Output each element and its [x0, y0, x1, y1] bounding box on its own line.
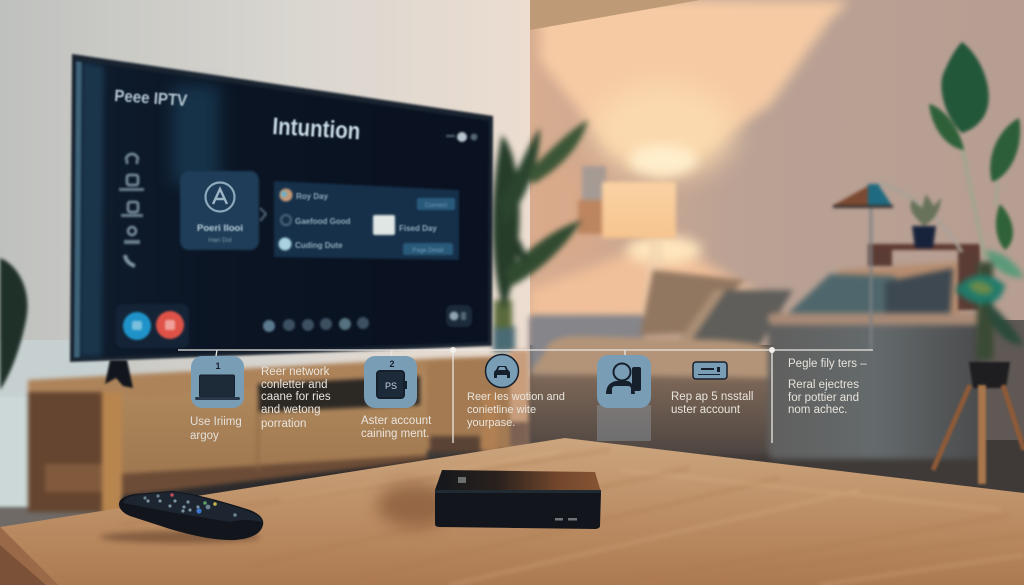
step 1 [190, 356, 331, 442]
tv menu panel: Connect [425, 203, 448, 209]
tv menu panel: Page Detail [412, 248, 444, 254]
tv sidebar icons [119, 154, 144, 266]
ceiling [530, 0, 700, 30]
tv menu panel: Fised Day [399, 224, 437, 233]
tv small button [446, 305, 472, 327]
tv heading: Intuntion [272, 113, 361, 145]
tv divider [124, 296, 470, 298]
tv feet [105, 360, 133, 388]
wooden table [0, 438, 1024, 585]
step 3 [467, 354, 565, 429]
lamp glow on wall [529, 0, 850, 322]
step 5 description: nom achec. [788, 404, 847, 416]
timeline line [178, 350, 873, 443]
step 1 caption: Use Iriimg [190, 416, 242, 428]
television [70, 54, 493, 388]
tv profile card: Hari Dol [208, 237, 232, 244]
icon: car [486, 354, 518, 388]
tv pagination icons [263, 317, 369, 332]
step 2 caption: Aster account [361, 415, 432, 427]
step 3 description: yourpase. [467, 417, 515, 429]
icon: laptop [191, 356, 244, 408]
icon: tablet: PS [385, 381, 397, 391]
left potted plant [0, 258, 40, 507]
tv menu panel: Cuding Dute [295, 241, 343, 250]
plant behind tv [492, 120, 588, 352]
tv brand: Peee IPTV [114, 86, 188, 110]
tv profile card: Poeri Ilooi [197, 223, 243, 234]
left wall [0, 0, 530, 400]
tv menu panel: Roy Day [296, 192, 329, 201]
icon: laptop: 1 [215, 361, 221, 371]
sofa [529, 262, 982, 459]
step 4 description: Rep ap 5 nsstall [671, 391, 753, 403]
desk lamp and side table [832, 183, 980, 350]
icon highlight column [597, 405, 651, 441]
tv stand [28, 350, 529, 514]
tv screen [73, 60, 489, 358]
step 5 heading: Pegle fily ters – [788, 358, 867, 370]
tv profile card [180, 171, 259, 250]
step 5 text [788, 358, 867, 416]
icon: tablet: 2 [389, 359, 395, 369]
step 1 description: and wetong [261, 404, 320, 416]
step 1 description: conletter and [261, 379, 328, 391]
step 3 description: Reer Ies wotion and [467, 391, 565, 403]
step 4 description: uster account [671, 404, 741, 416]
icon: receiver [693, 362, 727, 379]
tripod stand [933, 362, 1024, 484]
remote control [100, 491, 263, 543]
tv menu panel [274, 181, 459, 260]
timeline nodes [450, 347, 775, 353]
side table [868, 244, 980, 310]
set top box [377, 470, 601, 529]
tv chevron [260, 208, 266, 221]
step 1 description: caane for ries [261, 391, 331, 403]
step 1 description: porration [261, 418, 306, 430]
step 2 [361, 356, 432, 440]
step 3 description: conietline wite [467, 404, 536, 416]
large plant right [929, 42, 1024, 484]
step 2 caption: caining ment. [361, 428, 429, 440]
step 1 description: Reer network [261, 366, 330, 378]
step 5 description: for pottier and [788, 392, 859, 404]
tv status icons [446, 132, 478, 142]
icon: technician [597, 355, 651, 408]
step 5 description: Reral ejectres [788, 379, 859, 391]
tv app tray [116, 304, 189, 348]
table lamp with glowing shade [578, 166, 676, 320]
tv frame [70, 54, 493, 362]
icon: tablet [364, 356, 417, 408]
step 1 caption: argoy [190, 430, 219, 442]
step 4 [597, 355, 753, 441]
tv menu panel: Gaefood Good [295, 217, 351, 226]
